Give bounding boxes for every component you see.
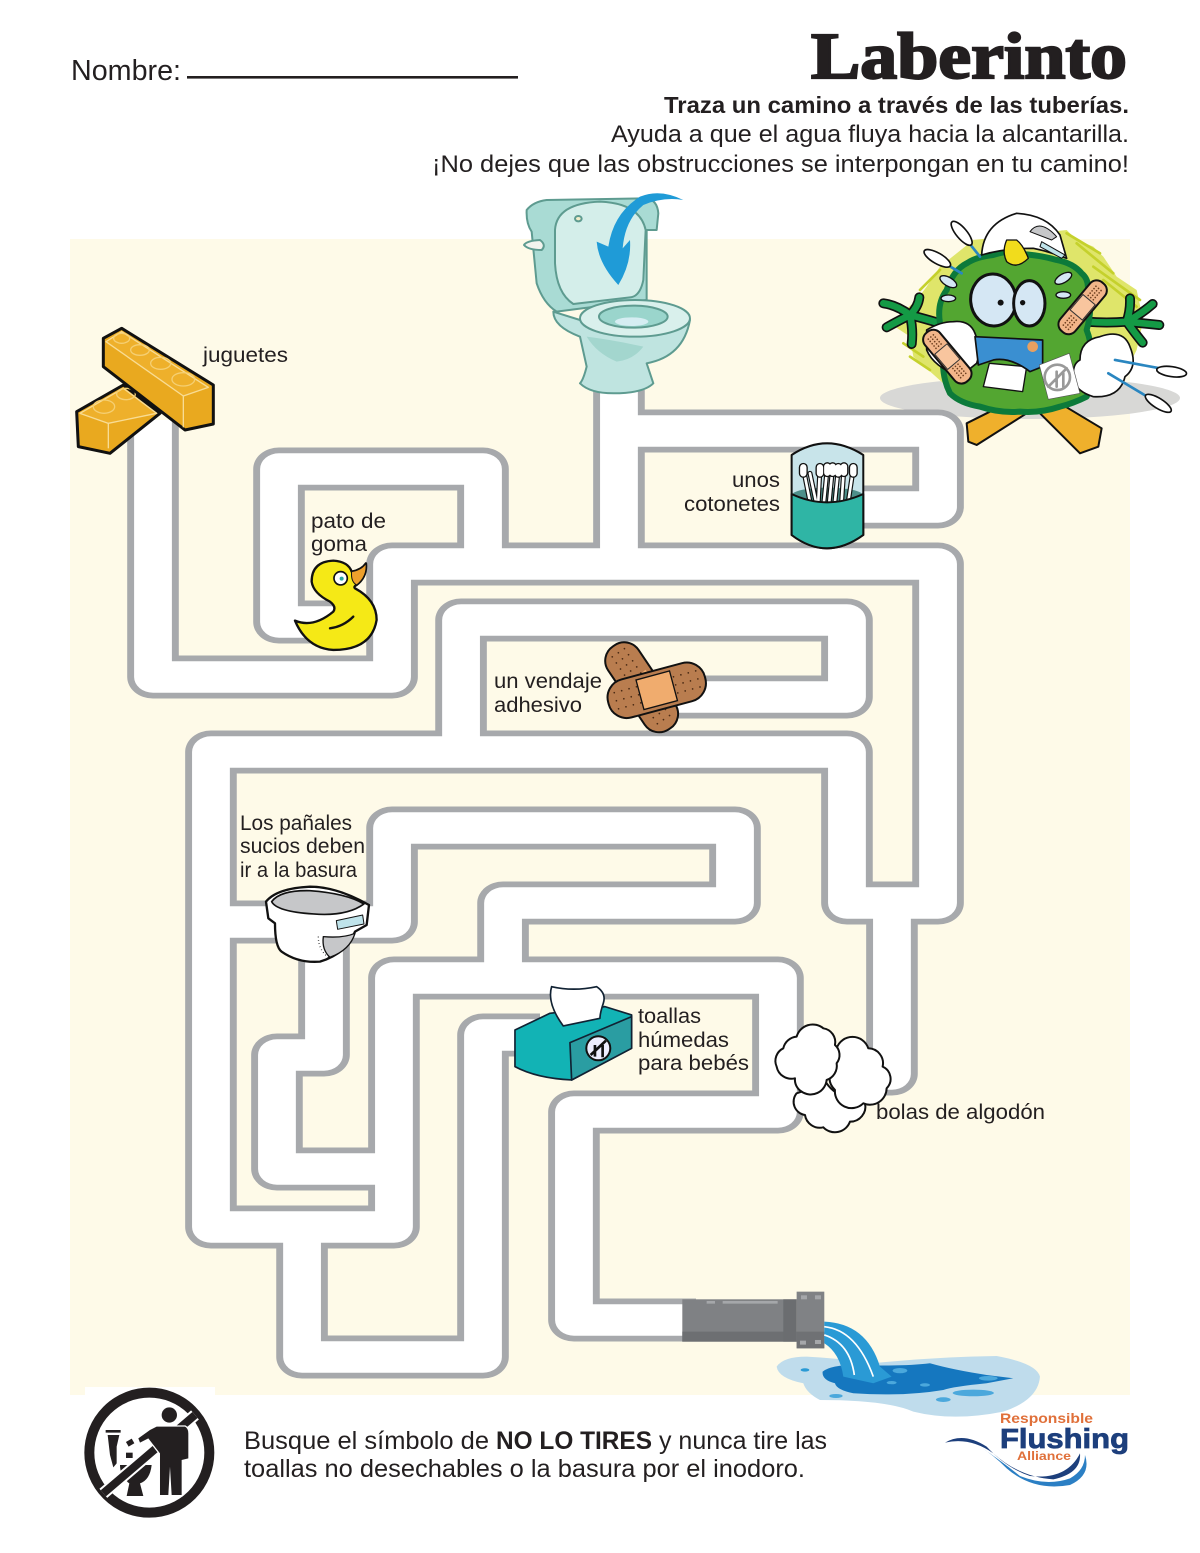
label: pato de goma: goma [311,532,367,556]
label: un vendaje adhesivo [494,669,602,717]
title: Laberinto [811,20,1127,93]
icon: tissue box [515,987,632,1080]
label: diapers: sucios deben [240,834,365,858]
instructions: Traza un camino a través de las tuberías. [664,92,1129,118]
label: toallas humedas: húmedas [638,1028,729,1052]
label: toallas humedas [638,1004,749,1075]
note text: Busque el símbolo de [244,1427,489,1455]
label: unos cotonetes: cotonetes [684,492,780,516]
label: toallas humedas: toallas [638,1004,701,1028]
label: juguetes: juguetes [202,343,288,367]
label: pato de goma: pato de [311,509,386,533]
label: diapers: Los pañales [240,811,352,835]
label: un vendaje adhesivo: adhesivo [494,693,582,717]
icon: water puddle [777,1356,1040,1417]
label: un vendaje adhesivo: un vendaje [494,669,602,693]
icon: outlet pipe [682,1292,892,1383]
note text: y nunca tire las [659,1427,827,1455]
instructions: Ayuda a que el agua fluya hacia la alcantarilla. [611,121,1129,148]
label: bolas de algodon: bolas de algodón [876,1100,1045,1124]
logo: Responsible Flushing Alliance [945,1410,1129,1486]
label: unos cotonetes: unos [732,468,780,492]
icon: cotton balls [775,1024,891,1132]
icon: cotton swab jar [792,443,863,548]
label: toallas humedas: para bebés [638,1051,749,1075]
label: diapers: ir a la basura [240,858,357,882]
label: pato de goma [311,509,386,556]
icon: clog monster [883,213,1187,453]
name field: Nombre: [71,55,181,87]
note text [244,1427,827,1483]
note text: NO LO TIRES [496,1427,652,1455]
icon: diaper [266,887,369,962]
monster shadow [880,377,1180,419]
maze pipes [153,390,938,1357]
instructions [432,92,1129,178]
label: diapers [240,811,365,882]
logo: Responsible Flushing Alliance: Flushing [1000,1423,1129,1454]
white patch behind symbol [85,1387,215,1396]
icon: toy bricks [77,328,213,453]
icon: rubber duck [295,561,377,650]
logo: Responsible Flushing Alliance: Responsible [1000,1410,1093,1426]
label: unos cotonetes [684,468,780,516]
logo: Responsible Flushing Alliance: Alliance [1017,1449,1071,1463]
instructions: ¡No dejes que las obstrucciones se interpongan en tu camino! [432,151,1129,178]
icon: adhesive bandage [598,636,710,739]
note text: toallas no desechables o la basura por el inodoro. [244,1455,805,1483]
background panel [70,239,1130,1395]
icon: toilet [524,193,690,393]
icon: do not flush symbol [89,1393,209,1513]
